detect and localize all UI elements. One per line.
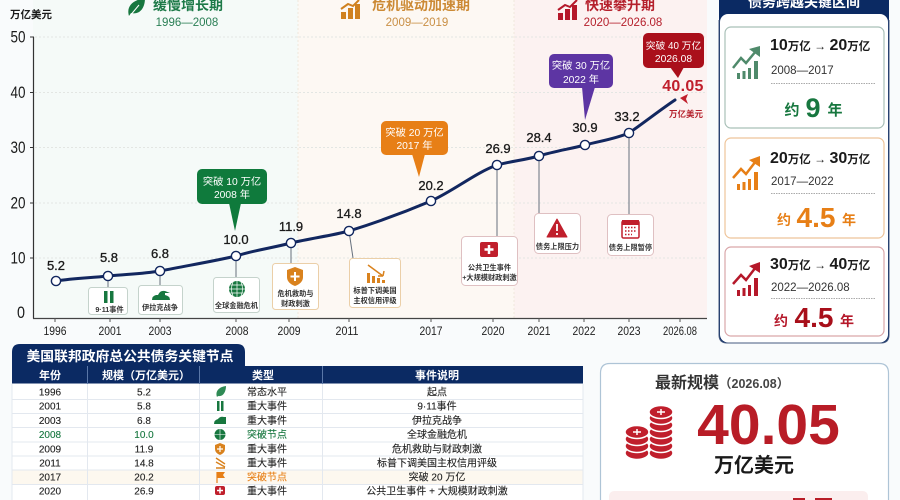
card: 10 to 20 trillion [725,27,884,128]
y axis: 30 [10,139,26,157]
event: S&P downgrade: 标普下调美国 [353,286,397,295]
data value labels: 20.2 [418,178,444,193]
x axis: 2026.08 [663,326,697,338]
data value labels: 5.2 [47,258,65,273]
panel: key debt milestones intervals [719,0,889,343]
row 2003: 2003 [39,416,62,427]
table header: 年份 [39,368,61,382]
event: global financial crisis: 全球金融危机 [215,301,259,310]
callout: 40 trillion [643,33,704,78]
x axis: 2021 [528,326,550,338]
card: 10 to 20 trillion: 年 [827,101,843,119]
row 2003: 6.8 [137,416,151,427]
row 2001 [39,400,457,412]
row 2011 [39,456,497,470]
y axis: 50 [10,28,26,46]
x axis: 2011 [336,326,358,338]
latest value label: 40.05 [662,78,704,95]
row 2017: 突破节点 [247,470,287,484]
phase header: slow growth: 1996—2008 [156,17,218,29]
x axis: 2003 [148,326,172,338]
event: S&P downgrade [350,258,400,308]
event: Iraq war: 伊拉克战争 [142,303,178,312]
row 2017: 20.2 [134,472,154,484]
card: 10 to 20 trillion: 9 [805,93,821,123]
row 2001: 9·11事件 [417,400,457,412]
x axis: 2017 [420,326,442,338]
phase header: slow growth [128,0,223,29]
row 2017: 2017 [39,472,62,484]
y axis unit: 万亿美元 [10,8,52,21]
row 2001: 5.8 [137,402,151,412]
callout: 10 trillion [197,169,267,231]
data value labels: 14.8 [336,206,362,221]
row 2017 [39,470,465,484]
callout: 30 trillion: 突破 30 万亿 [552,59,610,72]
row 2017: 突破 20 万亿 [409,470,465,484]
table title tab: 美国联邦政府总公共债务关键节点 [27,348,234,364]
callout: 10 trillion: 2008 年 [214,188,250,201]
callout: 40 trillion: 突破 40 万亿 [646,39,701,52]
row 2003: 伊拉克战争 [412,414,462,427]
card: 20 to 30 trillion: 约 [777,212,791,228]
event: crisis bailout: 危机救助与 [278,289,313,298]
row 2001: 2001 [39,402,62,412]
card: 30 to 40 trillion: 约 [774,313,788,329]
card: 10 to 20 trillion: 10万亿 → 20万亿 [770,37,871,54]
y axis [10,28,34,322]
callout: 20 trillion: 突破 20 万亿 [385,126,444,139]
phase header: crisis driven acceleration [341,0,470,29]
table header: 类型 [252,368,274,382]
data value labels: 30.9 [572,120,598,135]
table header: 事件说明 [415,368,459,382]
row 2009: 危机救助与财政刺激 [392,442,482,456]
row 2020: 重大事件 [247,484,287,498]
data value labels: 26.9 [485,141,511,156]
data value labels: 28.4 [526,130,552,145]
row 2020: 公共卫生事件 + 大规模财政刺激 [366,484,508,498]
row 2020: 2020 [39,486,62,498]
event: 9/11: 9·11事件 [95,305,124,314]
row 2001: 重大事件 [247,400,287,412]
band: slow growth phase [33,0,298,318]
callout: 30 trillion: 2022 年 [563,73,599,86]
data value labels: 5.8 [100,250,118,265]
panel: latest scale [600,364,888,500]
x axis: 2020 [482,326,504,338]
event: global financial crisis [214,278,260,312]
event: public health and fiscal stimulus: 公共卫生事件 [468,263,511,272]
y axis: 10 [10,250,26,268]
row 1996 [39,386,447,398]
x axis: 2001 [98,326,122,338]
card: 20 to 30 trillion: 4.5 [797,202,835,233]
card: 30 to 40 trillion [725,247,884,336]
row 2008: 10.0 [134,430,154,441]
growth box [609,491,868,500]
row 2003 [39,414,462,427]
stems from data points to event boxes [108,133,629,287]
row 2009 [39,442,482,456]
event: crisis bailout [272,264,318,310]
row 1996: 1996 [39,388,62,398]
event: crisis bailout: 财政刺激 [281,299,311,308]
row 2008: 突破节点 [247,428,287,441]
row 1996: 起点 [427,386,447,398]
card: 10 to 20 trillion: 2008—2017 [771,65,834,77]
card: 20 to 30 trillion: 年 [842,212,856,228]
x axis: 2022 [572,326,596,338]
row 2009: 2009 [39,444,62,456]
latest value label: 万亿美元 [669,109,703,119]
callout: 10 trillion: 突破 10 万亿 [203,175,261,188]
phase header: crisis driven acceleration: 2009—2019 [386,17,448,29]
row 2008: 2008 [39,430,62,441]
table header: 规模（万亿美元） [102,368,190,382]
event: S&P downgrade: 主权信用评级 [353,296,397,305]
row 2009: 重大事件 [247,442,287,456]
event: Iraq war [138,286,182,314]
row 2008 [39,428,467,441]
x axis: 1996 [44,326,66,338]
y axis: 20 [10,194,26,212]
y axis: 0 [17,304,25,322]
row 2008: 全球金融危机 [407,428,467,441]
card: 30 to 40 trillion: 30万亿 → 40万亿 [770,256,871,273]
card: 20 to 30 trillion: 2017—2022 [771,176,834,188]
latest scale unit: 万亿美元 [714,454,794,477]
callout: 30 trillion [549,54,613,120]
card: 10 to 20 trillion: 约 [784,102,800,119]
table: key debt nodes [12,344,583,500]
event: debt ceiling suspension: 债务上限暂停 [609,243,652,252]
latest scale value: 40.05 [697,393,840,457]
x axis: 2023 [618,326,640,338]
table title tab [12,344,245,366]
card: 30 to 40 trillion: 4.5 [795,302,833,333]
row 2020: 26.9 [134,486,154,498]
callout: 20 trillion [381,121,448,177]
event: 9/11 [88,288,128,314]
card: 20 to 30 trillion [725,138,884,238]
y axis: 40 [10,84,26,102]
data value labels: 33.2 [614,109,640,124]
icon: coin stacks [625,406,673,460]
card: 30 to 40 trillion: 年 [840,313,854,329]
row 2011: 标普下调美国主权信用评级 [377,456,497,470]
row 2020 [39,484,508,498]
event: debt ceiling pressure: 债务上限压力 [536,242,579,251]
callout: 20 trillion: 2017 年 [396,139,433,152]
event: public health and fiscal stimulus: +大规模财政刺激 [462,273,518,282]
event: debt ceiling pressure [534,214,580,254]
x axis [33,318,707,338]
row 2009: 11.9 [135,444,154,456]
x axis: 2009 [278,326,300,338]
band: crisis acceleration phase [298,0,514,318]
card: 30 to 40 trillion: 2022—2026.08 [771,282,850,294]
card: 20 to 30 trillion: 20万亿 → 30万亿 [770,150,871,167]
table header [12,366,583,384]
data value labels: 6.8 [151,246,169,261]
debt line chart [51,100,675,286]
row 1996: 5.2 [137,388,151,398]
event: public health and fiscal stimulus [462,236,518,286]
row 1996: 常态水平 [247,386,287,398]
row 2011: 2011 [39,458,61,470]
phase header: rapid climb: 2020—2026.08 [584,17,662,29]
data value labels [47,109,640,273]
callout: 40 trillion: 2026.08 [655,54,692,65]
phase header: rapid climb [558,0,662,29]
event: debt ceiling suspension [608,214,654,256]
latest value label [662,78,704,119]
data value labels: 10.0 [223,232,249,247]
data value labels: 11.9 [279,219,303,234]
row 2011: 重大事件 [247,456,287,470]
band: rapid climb phase [514,0,707,318]
row 2011: 14.8 [134,458,154,470]
latest scale heading: 最新规模（2026.08） [655,373,789,392]
row 2003: 重大事件 [247,414,287,427]
x axis: 2008 [226,326,248,338]
